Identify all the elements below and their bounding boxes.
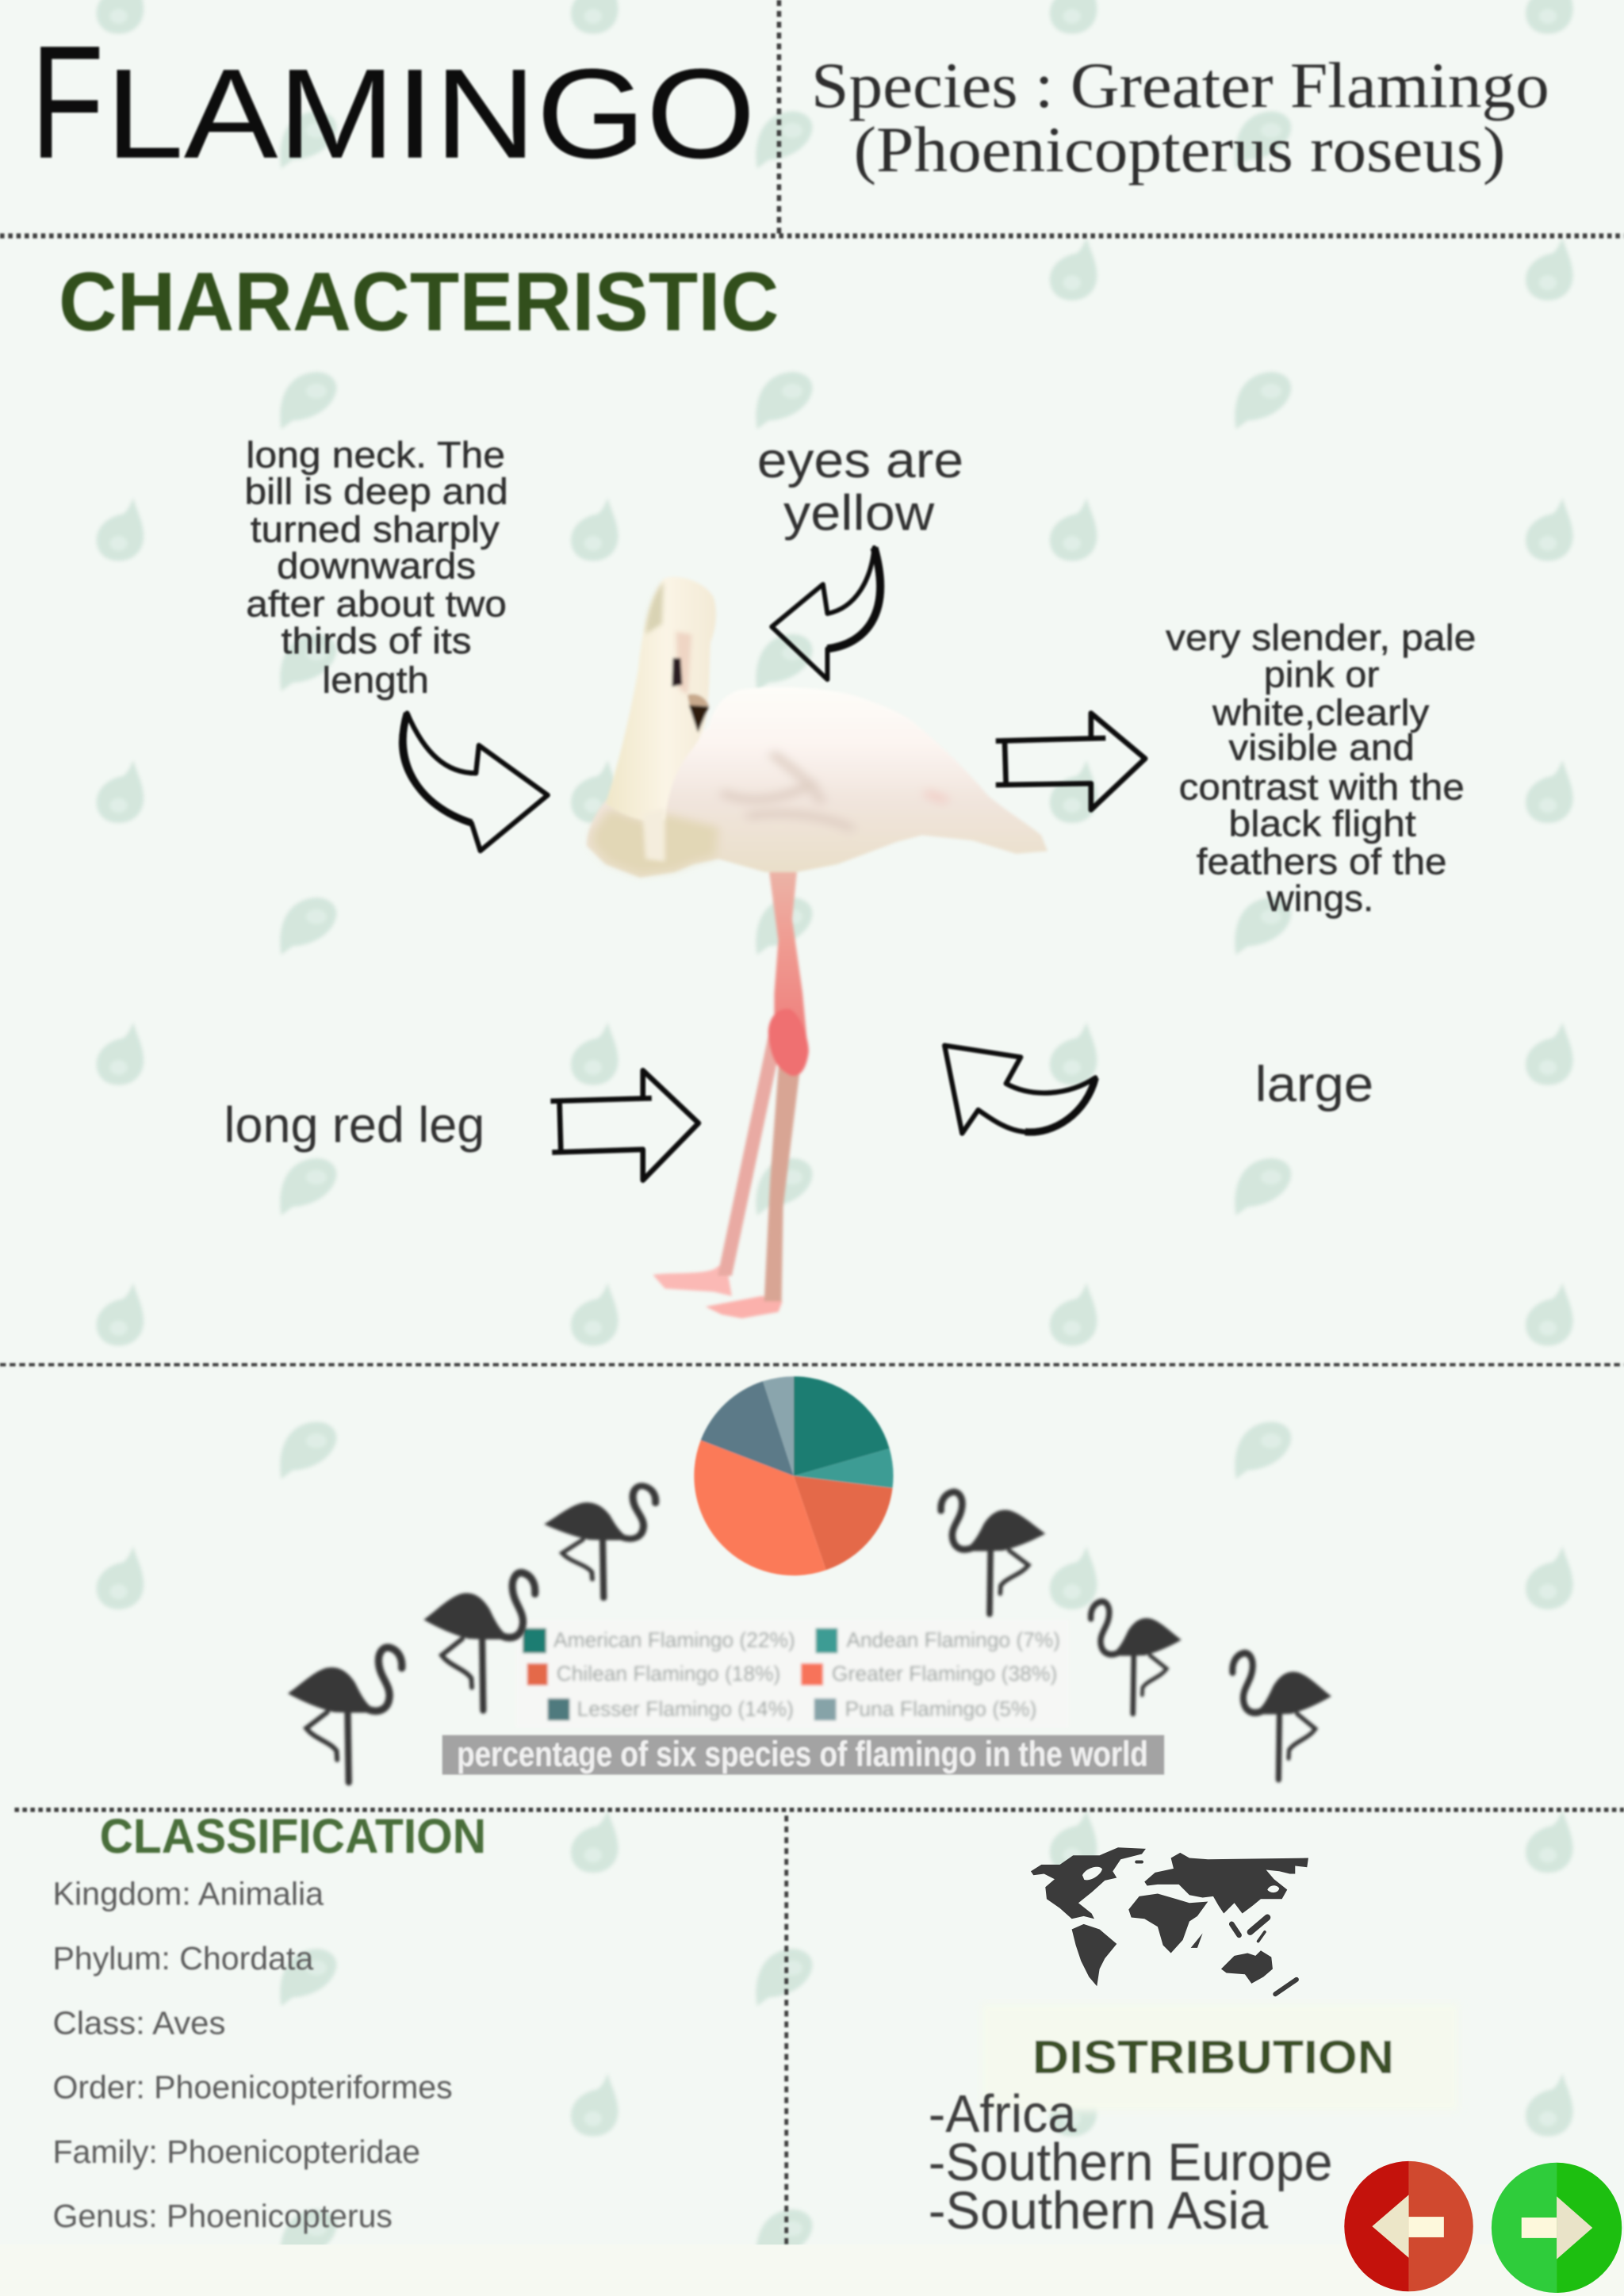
flamingo chest shading [593,809,718,874]
text: wing description [1166,617,1476,919]
text: neck description: long neck. The [246,434,505,475]
button: previous [1344,2161,1473,2291]
species name: Species : Greater Flamingo [811,50,1549,121]
species name [811,50,1549,186]
arrow: to body size [944,1046,1095,1134]
text: neck description: thirds of its [282,620,472,661]
text: wing description: wings. [1266,878,1373,919]
distribution list: -Africa [929,2085,1076,2144]
pie legend: Andean Flamingo (7%) [846,1628,1060,1652]
pie legend: Greater Flamingo (38%) [832,1662,1057,1686]
text: eyes are yellow: yellow [783,486,935,541]
classification list: Phylum: Chordata [52,1940,314,1976]
text: eyes are yellow [757,433,963,541]
text: neck description: length [322,660,429,701]
title: LAMINGO [105,44,756,186]
classification list: Genus: Phoenicopterus [52,2198,393,2234]
text: wing description: white,clearly [1212,691,1429,733]
silhouette 3 [544,1486,656,1598]
text: neck description: downwards [277,545,476,587]
pie legend: American Flamingo (22%) [553,1628,795,1652]
flamingo legs [653,855,809,1318]
pie legend: Puna Flamingo (5%) [845,1697,1036,1721]
flamingo body and neck [587,577,1048,878]
flamingo neck lower strip [642,809,665,862]
silhouette 4 [941,1492,1045,1614]
flamingo bill [672,632,709,733]
classification list: Family: Phoenicopteridae [52,2133,420,2170]
text: wing description: very slender, pale [1166,617,1476,658]
pie chart [694,1376,894,1575]
silhouette 6 [1232,1653,1331,1779]
text: wing description: black flight [1228,803,1416,844]
classification list: Order: Phoenicopteriformes [52,2069,453,2106]
pie legend: Lesser Flamingo (14%) [577,1697,794,1721]
flamingo head shading [645,581,664,634]
text: wing description: contrast with the [1179,766,1465,807]
classification list: Class: Aves [52,2004,225,2041]
heading: characteristic: CHARACTERISTIC [59,256,779,349]
flamingo photo illustration [587,577,1048,1318]
classification list [52,1876,453,2234]
silhouette 5 [1091,1601,1182,1713]
text: neck description [244,434,508,701]
text: neck description: bill is deep and [244,470,508,511]
text: long red leg: long red leg [224,1098,485,1154]
silhouette 2 [423,1573,535,1710]
heading: distribution: DISTRIBUTION [1032,2031,1394,2084]
distribution list: -Southern Europe [929,2133,1333,2192]
arrow: to leg [550,1070,699,1181]
pie legend [515,1620,1069,1728]
distribution list: -Southern Asia [929,2182,1268,2241]
arrow: to neck [401,714,548,851]
arrow: to eye [772,548,880,679]
text: eyes are yellow: eyes are [757,433,963,488]
arrow: to wing text [996,714,1145,809]
title [31,13,756,193]
icon: world map [1031,1847,1308,1994]
chart caption: percentage of six species of flamingo in the world [457,1735,1148,1774]
button: next [1492,2163,1622,2293]
silhouette 1 [288,1647,402,1782]
pie legend: Chilean Flamingo (18%) [557,1662,780,1686]
flamingo neck [606,577,716,821]
flamingo wing shading [722,753,947,830]
distribution list [929,2085,1333,2241]
flamingo silhouettes [288,1486,1331,1782]
text: large: large [1255,1057,1373,1112]
text: neck description: turned sharply [251,508,500,549]
text: neck description: after about two [246,584,507,625]
text: wing description: pink or [1264,653,1380,695]
flamingo body [587,687,1048,878]
species name: (Phoenicopterus roseus) [854,114,1505,186]
heading: classification: CLASSIFICATION [100,1809,486,1863]
text: wing description: visible and [1228,727,1415,768]
heading: distribution [981,2003,1458,2111]
text: wing description: feathers of the [1197,841,1447,882]
title: F [31,13,104,193]
classification list: Kingdom: Animalia [52,1876,324,1912]
